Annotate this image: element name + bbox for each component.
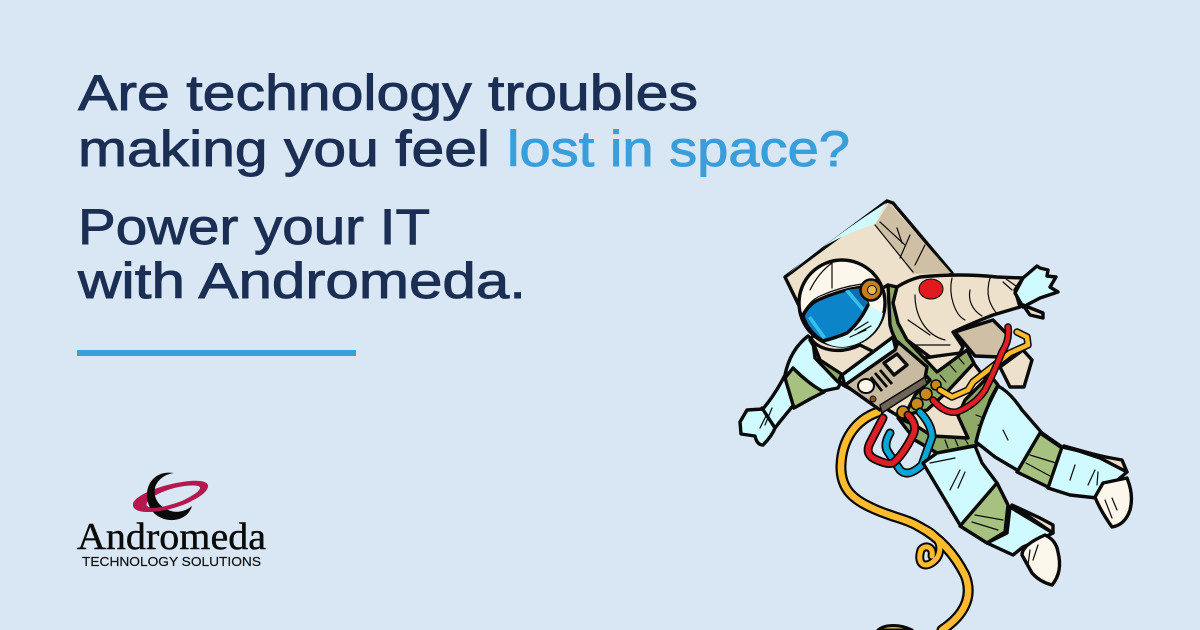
near arm and glove — [893, 266, 1058, 357]
carabiners — [868, 412, 932, 473]
logo: Andromeda Technology Solutions: Andromeda — [77, 516, 266, 558]
red cable and yellow rod — [933, 327, 1028, 412]
logo: Andromeda Technology Solutions: TECHNOLOGY SOLUTIONS — [82, 554, 261, 569]
heading: question — [78, 65, 850, 177]
heading: call to action — [77, 199, 526, 309]
heading: call to action: Power your IT — [78, 199, 430, 255]
helmet — [799, 260, 885, 375]
heading: question: Are technology troubles — [78, 65, 698, 121]
chest control box — [842, 337, 941, 418]
heading: question: making you feel — [78, 121, 490, 177]
accent rule — [77, 350, 356, 356]
heading: call to action: with Andromeda. — [77, 253, 526, 309]
red shoulder patch — [919, 279, 943, 299]
far leg and boot — [923, 446, 1060, 585]
illustration: astronaut — [740, 201, 1131, 630]
yellow tether — [841, 412, 968, 630]
torso and harness — [810, 285, 998, 453]
far arm and glove — [740, 336, 843, 445]
near leg and boot — [976, 386, 1131, 527]
logo mark: crescent and ring — [133, 473, 208, 520]
logo: Andromeda Technology Solutions — [77, 473, 266, 569]
backpack — [785, 201, 1032, 387]
helmet valve — [860, 280, 882, 300]
heading: question: lost in space? — [507, 121, 850, 177]
